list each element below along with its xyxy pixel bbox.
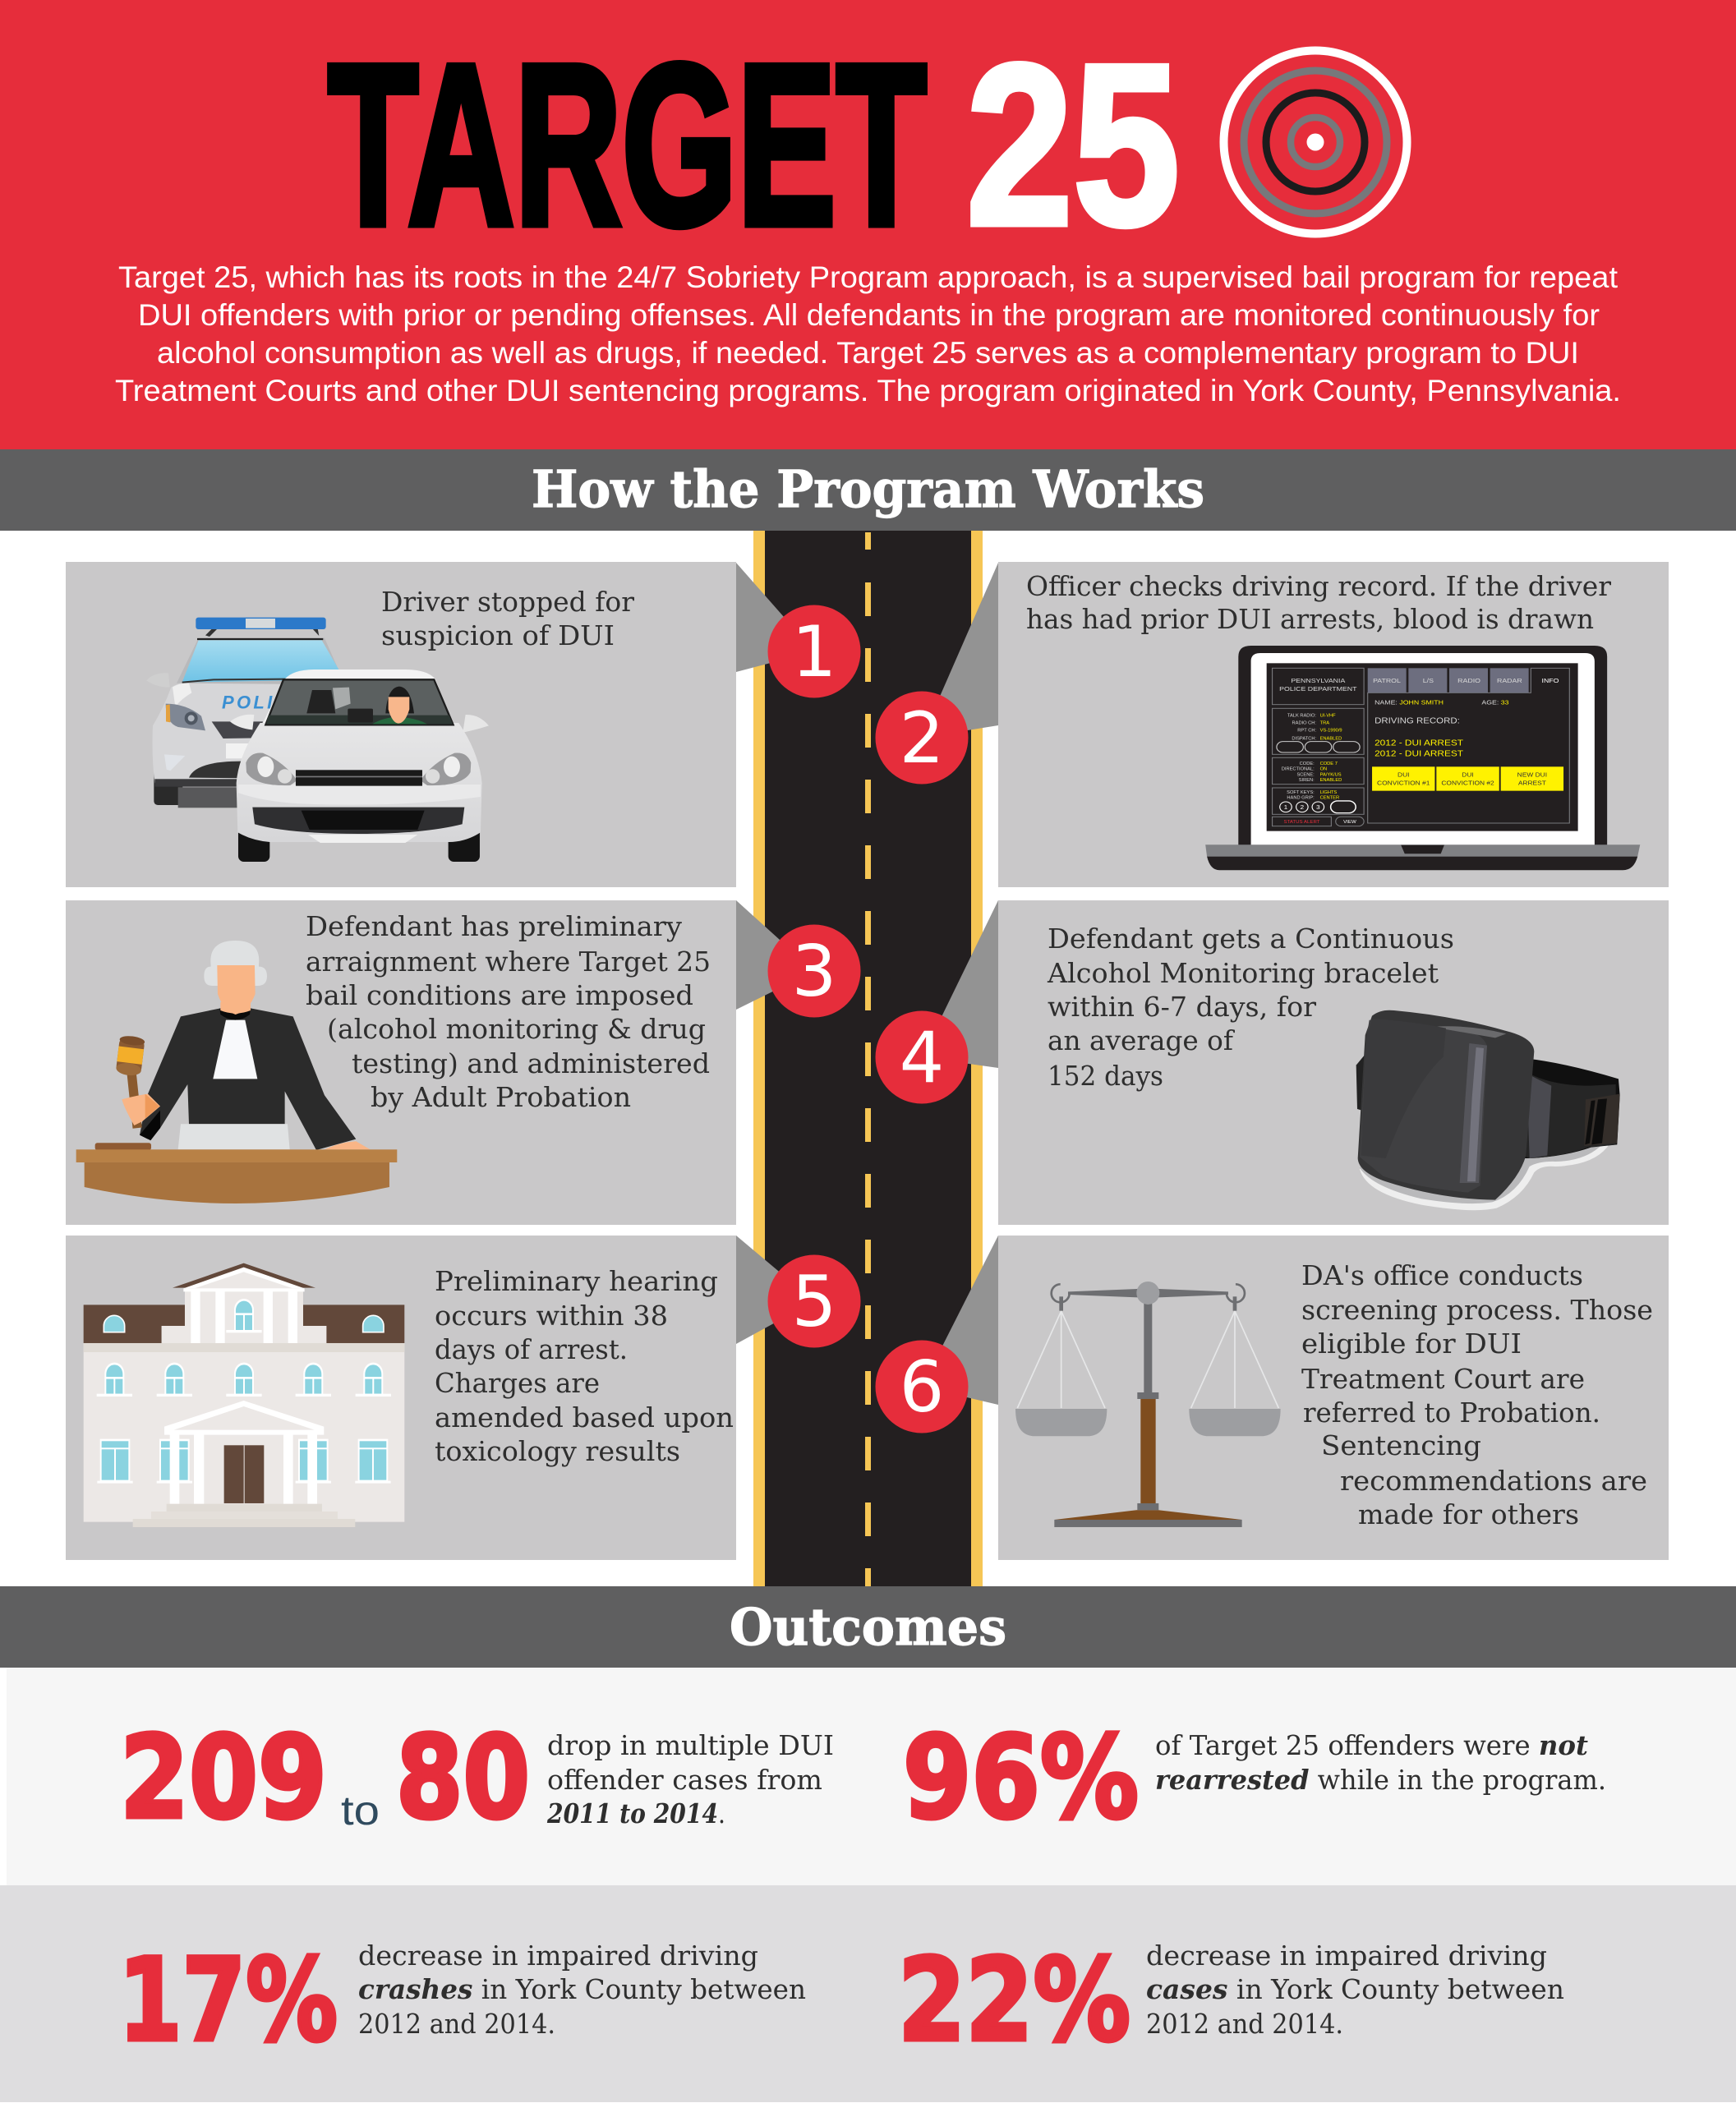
panel 1 text: Driver stopped for: [381, 586, 634, 618]
stat text: 209 to 80: offender cases from: [547, 1764, 822, 1796]
stat text: 209 to 80: [546, 1729, 834, 1829]
panel 5 text: [435, 1265, 734, 1467]
road: [753, 531, 983, 1586]
intro paragraph: DUI offenders with prior or pending offenses. All defendants in the program are monitored continuously for: [138, 298, 1600, 332]
panel 4 text: 152 days: [1048, 1060, 1163, 1092]
icon: laptop with police screen: ENABLED: [1320, 778, 1342, 783]
stat: 17%: 17%: [118, 1934, 338, 2067]
step 4: [876, 1010, 968, 1104]
panel 3 text: (alcohol monitoring & drug: [327, 1013, 706, 1045]
icon: laptop with police screen: 3: [1316, 803, 1320, 811]
icon: laptop with police screen: 2012 - DUI ARREST: [1375, 749, 1463, 758]
icon: laptop with police screen: CODE:: [1300, 762, 1315, 766]
intro paragraph: [115, 260, 1621, 407]
stat text: 22%: decrease in impaired driving: [1146, 1940, 1547, 1972]
icon: laptop with police screen: 1: [1284, 803, 1287, 811]
icon: laptop with police screen: POLICE DEPARTMENT: [1279, 685, 1356, 693]
section band: How the Program Works: [0, 449, 1736, 531]
panel 6 text: recommendations are: [1340, 1465, 1647, 1497]
icon: laptop with police screen: UI-VHF: [1320, 714, 1336, 718]
icon: laptop with police screen: DUI: [1398, 771, 1409, 778]
icon: laptop with police screen: 2012 - DUI ARREST: [1375, 739, 1463, 748]
panel 6 text: Sentencing: [1321, 1429, 1481, 1461]
panel 5: preliminary hearing: [66, 1236, 736, 1560]
icon: courthouse: [84, 1263, 404, 1527]
panel 4 text: within 6-7 days, for: [1048, 991, 1316, 1023]
panel 1: driver stopped: [66, 562, 736, 887]
icon: laptop with police screen: [1205, 646, 1640, 870]
heading: How the Program Works: [532, 459, 1204, 519]
panel 4 text: Alcohol Monitoring bracelet: [1047, 957, 1439, 989]
step 6: [876, 1341, 968, 1433]
section band: Outcomes: [0, 1586, 1736, 1668]
panel 6: DA screening: [998, 1236, 1669, 1560]
red header background: [0, 0, 1736, 449]
icon: target: [1224, 51, 1407, 233]
stat: 209 to 80: to: [341, 1788, 380, 1834]
stat text: 96%: rearrested while in the program.: [1155, 1764, 1606, 1796]
panel 3 text: [306, 910, 711, 1113]
panel 5 text: occurs within 38: [435, 1300, 668, 1332]
stat text: 17%: 2012 and 2014.: [358, 2008, 555, 2040]
panel 6 text: eligible for DUI: [1301, 1328, 1522, 1360]
panel 4 text: [1047, 923, 1454, 1092]
icon: laptop with police screen: LIGHTS: [1320, 790, 1338, 795]
step 2: [876, 692, 968, 784]
icon: laptop with police screen: DRIVING RECORD:: [1375, 716, 1460, 725]
icon: laptop with police screen: PENNSYLVANIA: [1291, 677, 1346, 684]
panel 2: officer checks driving record: [998, 562, 1669, 887]
step 3: 3: [792, 931, 836, 1013]
icon: laptop with police screen: TRA: [1320, 721, 1329, 725]
panel 6 text: DA's office conducts: [1301, 1259, 1583, 1291]
icon: laptop with police screen: STATUS ALERT: [1283, 820, 1320, 825]
icon: laptop with police screen: AGE: 33: [1481, 699, 1509, 706]
icon: laptop with police screen: DISPATCH:: [1292, 737, 1316, 741]
icon: laptop with police screen: CONVICTION #1: [1377, 780, 1430, 786]
step 6: 6: [900, 1346, 944, 1429]
stat: 209 to 80: 209: [120, 1711, 327, 1844]
stat: 22%: 22%: [898, 1934, 1130, 2067]
icon: laptop with police screen: INFO: [1542, 677, 1559, 684]
panel 2 text: [1026, 570, 1611, 635]
icon: laptop with police screen: DUI: [1462, 771, 1474, 778]
icon: laptop with police screen: ENABLED: [1320, 737, 1342, 741]
intro paragraph: Treatment Courts and other DUI sentencing programs. The program originated in York County, Pennsylvania.: [115, 374, 1621, 407]
panel 2 text: Officer checks driving record. If the driver: [1026, 570, 1611, 602]
panel 5 text: Charges are: [435, 1367, 600, 1399]
panel 5 text: amended based upon: [435, 1401, 734, 1433]
panel 1 text: suspicion of DUI: [381, 619, 615, 651]
icon: laptop with police screen: 2: [1301, 803, 1304, 811]
step 5: 5: [792, 1261, 836, 1343]
icon: laptop with police screen: L/S: [1423, 677, 1434, 684]
panel 4: alcohol monitoring bracelet: [998, 900, 1669, 1225]
title: [328, 17, 1180, 274]
icon: laptop with police screen: VIEW: [1343, 820, 1356, 825]
stat text: 96%: [1155, 1729, 1606, 1796]
icon: laptop with police screen: SCENE:: [1296, 773, 1315, 777]
stat text: 17%: crashes in York County between: [358, 1973, 806, 2005]
stat text: 22%: [1146, 1940, 1564, 2040]
step numbers: [767, 605, 968, 1433]
panel 5 text: days of arrest.: [435, 1333, 628, 1365]
icon: police car: [146, 618, 345, 808]
icon: judge with gavel at bench: [76, 941, 397, 1203]
panel 6 text: Treatment Court are: [1301, 1363, 1585, 1395]
intro paragraph: Target 25, which has its roots in the 24/7 Sobriety Program approach, is a supervised bail program for repeat: [118, 260, 1619, 294]
step 4: 4: [900, 1017, 944, 1099]
icon: laptop with police screen: NAME: JOHN SMITH: [1375, 699, 1444, 706]
icon: laptop with police screen: CONVICTION #2: [1441, 780, 1494, 786]
stat: 209 to 80: [120, 1711, 530, 1844]
panel 3 text: by Adult Probation: [371, 1081, 631, 1113]
panel 6 text: referred to Probation.: [1303, 1397, 1600, 1429]
icon: laptop with police screen: CODE 7: [1320, 762, 1338, 766]
stat text: 96%: of Target 25 offenders were not: [1155, 1729, 1588, 1761]
icon: driver's white car: [230, 670, 489, 862]
panel 2 text: has had prior DUI arrests, blood is drawn: [1026, 603, 1594, 635]
stat: 209 to 80: 80: [396, 1711, 530, 1844]
icon: laptop with police screen: RADIO CH:: [1292, 721, 1316, 725]
icon: laptop with police screen: ON: [1320, 767, 1327, 772]
title word: TARGET: TARGET: [328, 17, 927, 274]
icon: laptop with police screen: ARREST: [1518, 780, 1546, 786]
callout pointers: [736, 563, 998, 1405]
panel 3 text: testing) and administered: [352, 1047, 710, 1079]
panel 3: preliminary arraignment: [66, 900, 736, 1225]
icon: laptop with police screen: PATROL: [1373, 677, 1401, 684]
icon: laptop with police screen: DIRECTIONAL:: [1282, 767, 1315, 772]
icon: laptop with police screen: CENTER: [1320, 796, 1339, 801]
panel 5 text: Preliminary hearing: [435, 1265, 718, 1297]
panel 3 text: Defendant has preliminary: [306, 910, 682, 942]
outcomes row 2: [0, 1885, 1736, 2102]
step 3: [767, 925, 861, 1017]
step 5: [767, 1255, 861, 1347]
stat text: 17%: [358, 1940, 806, 2040]
panel 5 text: toxicology results: [435, 1435, 680, 1467]
icon: laptop with police screen: HAND GRIP:: [1287, 796, 1315, 801]
stat text: 22%: cases in York County between: [1146, 1973, 1564, 2005]
panel 6 text: made for others: [1358, 1498, 1579, 1530]
stat: 96%: 96%: [903, 1711, 1139, 1844]
icon: laptop with police screen: VS-1990/9: [1320, 729, 1342, 734]
title number: 25: 25: [966, 17, 1180, 274]
stat text: 209 to 80: drop in multiple DUI: [547, 1729, 834, 1761]
step 1: 1: [792, 611, 836, 693]
panel 6 text: [1301, 1259, 1653, 1530]
icon: laptop with police screen: SOFT KEYS:: [1287, 790, 1315, 795]
icon: scales of justice: [1015, 1282, 1281, 1527]
outcomes row 1: [7, 1668, 1736, 1885]
step 2: 2: [900, 697, 944, 780]
icon: laptop with police screen: SIREN:: [1299, 778, 1315, 783]
panel 1 text: [381, 586, 634, 651]
icon: police car: POLICE: [222, 693, 306, 713]
panel 6 text: screening process. Those: [1301, 1294, 1653, 1326]
panel 4 text: an average of: [1048, 1024, 1236, 1056]
step 1: [767, 605, 861, 698]
icon: laptop with police screen: RPT CH:: [1297, 729, 1316, 734]
stat text: 209 to 80: 2011 to 2014.: [546, 1797, 725, 1829]
panel 3 text: bail conditions are imposed: [306, 979, 693, 1011]
stat text: 22%: 2012 and 2014.: [1146, 2008, 1343, 2040]
panel 4 text: Defendant gets a Continuous: [1048, 923, 1454, 955]
panel 3 text: arraignment where Target 25: [306, 946, 711, 978]
icon: monitoring bracelet: [1356, 1010, 1620, 1210]
stat text: 17%: decrease in impaired driving: [358, 1940, 758, 1972]
icon: laptop with police screen: RADAR: [1497, 677, 1522, 684]
heading: Outcomes: [730, 1597, 1006, 1657]
icon: laptop with police screen: TALK RADIO:: [1287, 714, 1316, 718]
icon: laptop with police screen: NEW DUI: [1517, 771, 1547, 778]
icon: laptop with police screen: PA/YK/US: [1320, 773, 1342, 777]
icon: laptop with police screen: RADIO: [1457, 677, 1481, 684]
intro paragraph: alcohol consumption as well as drugs, if needed. Target 25 serves as a complementary program to DUI: [157, 336, 1579, 370]
